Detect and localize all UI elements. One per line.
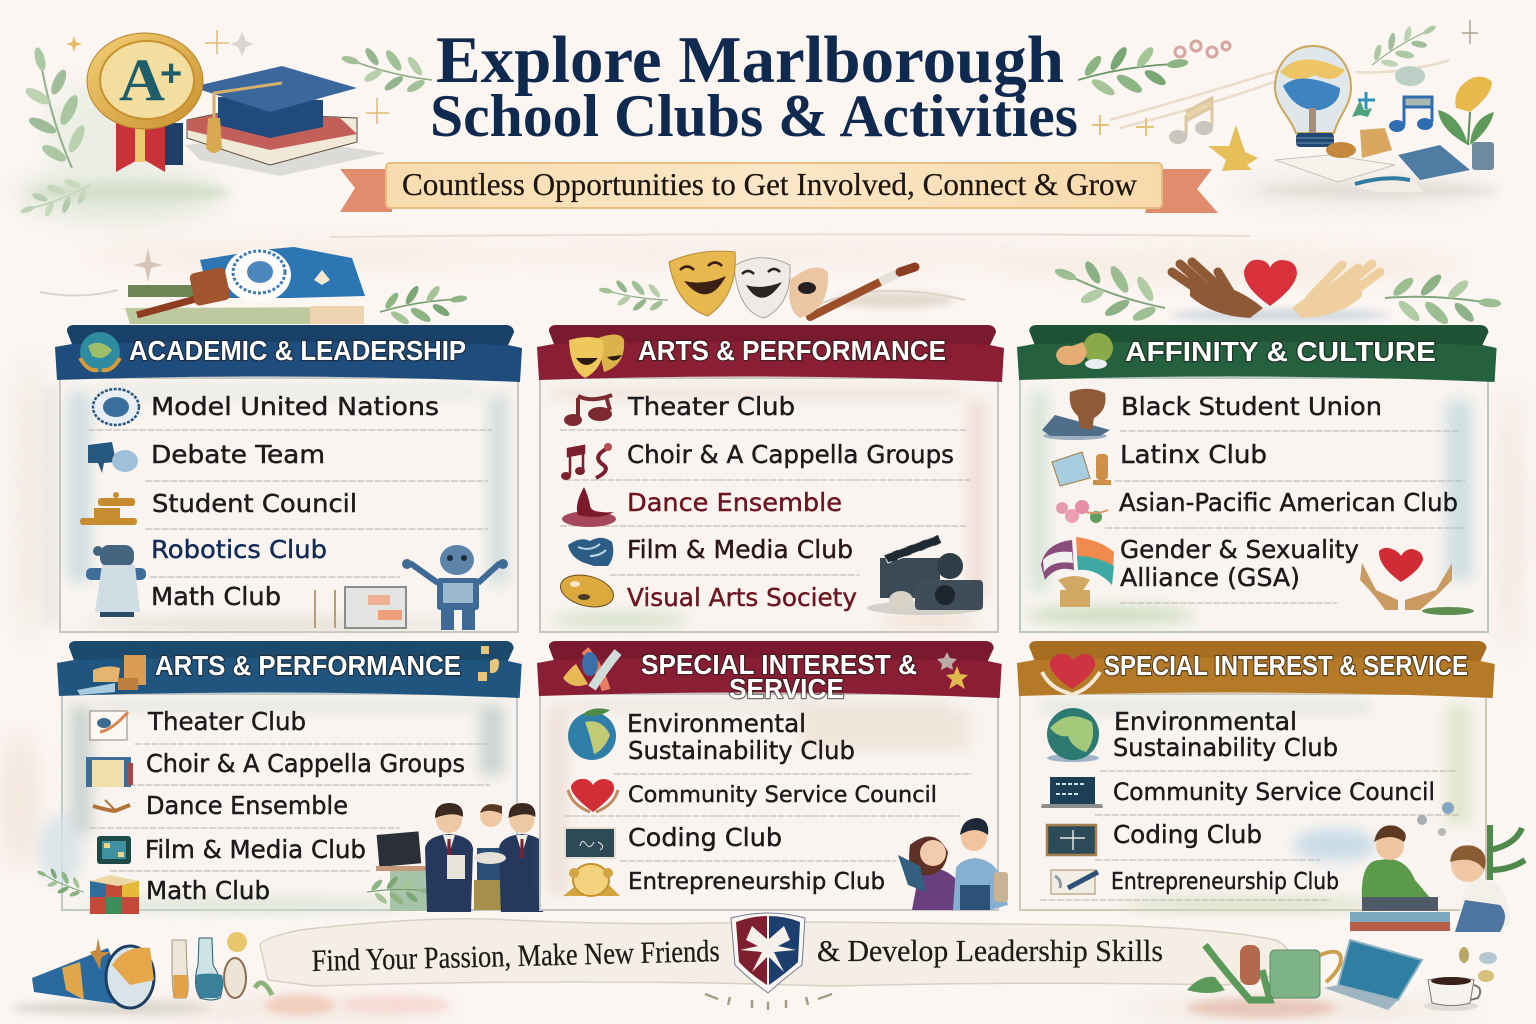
banner icon: globe [80,332,120,372]
light bulb [1275,46,1351,147]
banner heading: ARTS & PERFORMANCE [638,335,946,366]
students with book [898,818,1008,910]
graduation cap [192,66,357,153]
banner stars [937,652,968,689]
item text: Robotics Club [151,535,327,564]
icon: heart in hands [568,779,618,812]
icon: film blossom [568,538,613,566]
white mask [734,258,790,318]
icon: blossoms [1056,500,1108,523]
icon: dance figure [93,800,130,811]
banner heading: ACADEMIC & LEADERSHIP [129,335,466,366]
icon: folder [86,757,133,787]
item text: Asian-Pacific American Club [1119,488,1458,517]
shield crest [705,913,832,1010]
flower cluster [1175,41,1230,57]
item text: Theater Club [147,707,306,736]
banner icon [1056,333,1113,369]
icon: note with check [90,711,128,740]
icon: chalkboard [565,828,615,858]
panel body [540,694,998,910]
note mask [789,268,828,318]
icon: fist and book [1042,389,1110,440]
icon: council desk [80,492,137,525]
panel: Arts & Performance (blue) [32,641,545,914]
flag [200,247,365,298]
paper and booklet [1275,155,1395,182]
banner icon: gold pieces [478,646,499,681]
icon: flags [1041,537,1114,607]
panel: Arts & Performance (maroon) [537,325,1004,632]
panel: Special Interest & Service (maroon) [537,641,1008,910]
panel body [1020,378,1488,632]
banner icon: books [77,655,146,695]
leaves [32,860,89,904]
item text: Entrepreneurship Club [1111,869,1339,895]
icon: sketch with pen [1051,870,1098,894]
students with books [1350,802,1525,932]
footer text right: & Develop Leadership Skills [817,933,1163,968]
item text: Film & Media Club [627,535,853,564]
students with laptop [367,803,545,912]
icon: small robot [86,545,146,617]
flasks [172,940,188,998]
banner heading: AFFINITY & CULTURE [1125,336,1436,367]
item text: Latinx Club [1120,440,1267,469]
banner [1017,641,1495,698]
item text: Environmental [1114,707,1297,736]
icon: book and pillar [1052,452,1111,486]
item text: Dance Ensemble [627,488,842,517]
footer text left: Find Your Passion, Make New Friends [311,933,720,978]
brush [810,282,880,317]
banner [537,325,1004,382]
banner [57,641,522,698]
item text: Environmental [627,709,806,738]
item text: Debate Team [151,440,325,469]
item text: Community Service Council [628,783,937,808]
item text: Sustainability Club [628,736,855,765]
banner [537,641,1002,698]
item text: Community Service Council [1113,778,1435,806]
panel body [60,378,518,632]
subtitle ribbon: Countless Opportunities to Get Involved, Connect & Grow [402,166,1137,202]
panel body [62,694,517,910]
big robot [402,545,508,630]
music notes [1169,96,1433,144]
icon: seal [93,389,139,425]
decoration: gavel, seal and flag above academic panel [40,247,470,331]
icon: media tablet [97,836,131,864]
plant [1205,945,1270,1000]
icon: clef and note [561,443,612,480]
banner [55,325,522,382]
item text: Black Student Union [1121,392,1382,421]
footer right: watering can, laptop, cup [1187,940,1497,1018]
icon: chalkboard [1047,825,1096,855]
icon: earth with leaves [568,708,616,760]
A+ medal: + [160,53,182,95]
item text: Theater Club [627,392,795,421]
item text: Coding Club [628,823,782,852]
item text [1120,535,1359,592]
header: title [430,23,1078,149]
banner [1017,325,1497,382]
decoration: hands and heart above affinity panel [1046,245,1503,336]
item text: Math Club [146,876,270,905]
megaphone [32,948,130,1006]
banner heading: SPECIAL INTEREST & [641,649,917,680]
icon: gold clock [563,864,620,896]
icon: dance ribbon [562,487,616,527]
panel body [540,378,998,632]
gold star [1208,125,1258,171]
item text: Alliance (GSA) [1120,563,1300,592]
banner heading: SERVICE [729,673,844,704]
banner heading: ARTS & PERFORMANCE [155,650,461,681]
header: title: School Clubs & Activities [430,83,1078,149]
item text [627,709,855,765]
icon: notes [564,395,612,426]
header: title: Explore Marlborough [436,23,1064,97]
item text: Choir & A Cappella Groups [627,440,954,469]
header decoration right: light bulb, music, star [1074,11,1500,198]
gold mask [669,251,735,316]
icon: laptop [1041,777,1103,808]
item text: Sustainability Club [1113,733,1338,762]
item text: Film & Media Club [145,835,366,864]
laptop [1338,940,1422,1000]
item text: Dance Ensemble [146,791,348,820]
item text: Model United Nations [151,392,439,421]
icon: debate [88,442,138,473]
item text: Coding Club [1113,820,1262,849]
banner icon: heart in hands [1042,654,1100,695]
A+ medal: A [119,47,165,113]
sparkles [1092,115,1154,136]
banner heading: SPECIAL INTEREST & SERVICE [1104,650,1468,681]
roll [224,958,246,998]
subtitle ribbon [340,163,1218,213]
banner heading [641,649,917,704]
clapper and camera [867,535,983,615]
panel: Special Interest & Service (gold) [1017,641,1525,932]
scroll and lower book [185,136,386,176]
gavel [137,291,225,315]
icon: rubik cube [90,875,139,914]
item text: Choir & A Cappella Groups [146,749,465,778]
icon: earth [1047,708,1099,762]
panel: Academic & Leadership [42,325,522,632]
pebbles [1459,947,1469,963]
item text: Student Council [152,489,357,518]
star and sun [90,938,110,970]
item text: Gender & Sexuality [1120,535,1359,564]
can [1270,950,1320,998]
cup [1424,1001,1478,1011]
board [315,587,406,628]
item text [1113,707,1338,762]
plant and heart [1455,77,1492,112]
banner icon: masks [569,334,624,378]
icon: hands and heart [1360,548,1474,615]
decoration: theater masks and brush above arts panel [596,251,965,318]
panel: Affinity & Culture [1017,325,1497,632]
item text: Math Club [151,582,281,611]
footer banner [260,919,1289,986]
seal [225,248,291,302]
item text: Visual Arts Society [627,583,857,612]
icon: palette [557,570,617,612]
item text: Entrepreneurship Club [628,869,885,895]
banner icon: tools [563,650,618,690]
footer left: megaphone, flasks, scroll [10,932,450,1015]
header decoration left: medal, cap, books [8,30,437,228]
A+ medal [87,33,203,172]
panel body [1020,694,1486,910]
